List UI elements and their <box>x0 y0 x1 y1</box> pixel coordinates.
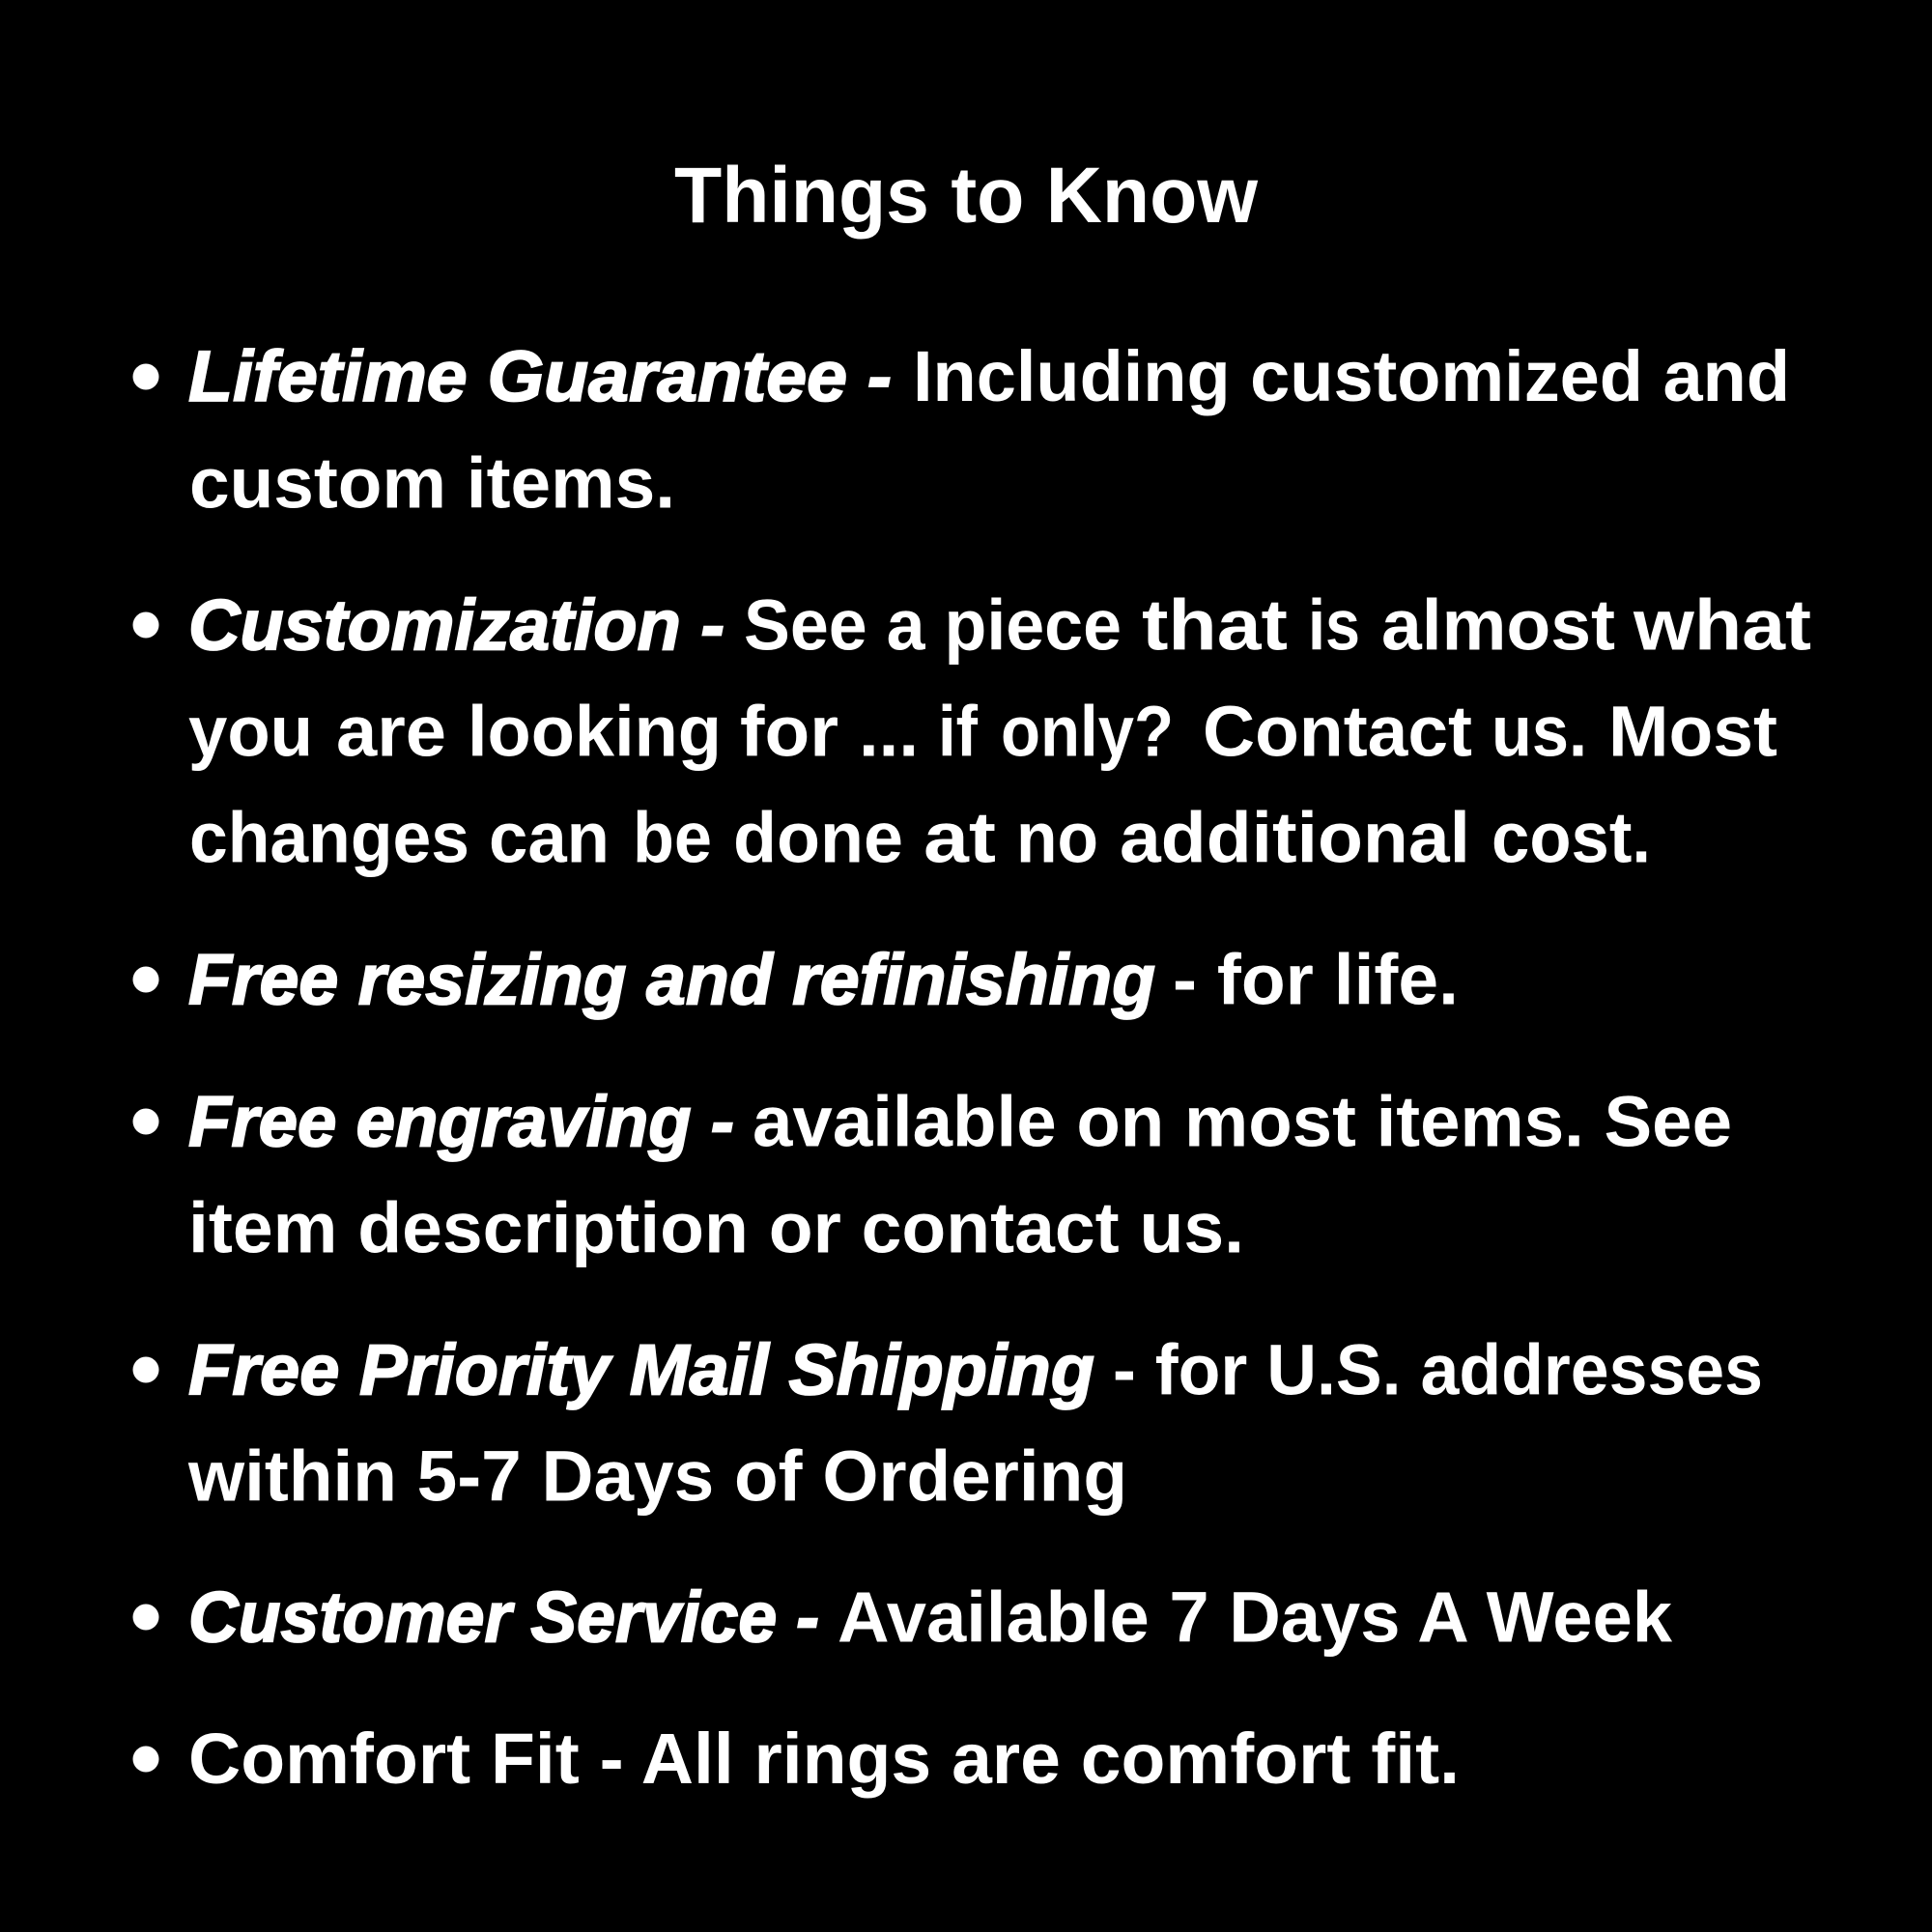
title: Things to Know <box>674 152 1258 240</box>
list item: Customization: you <box>188 692 313 771</box>
list item: Customization: is <box>1308 585 1360 665</box>
list item: Free Priority Mail Shipping: Free Priority Mail Shipping <box>188 1329 1094 1410</box>
list item: Free engraving: item description or contact us. <box>188 1188 1244 1267</box>
list item: Lifetime Guarantee: Lifetime Guarantee - <box>188 336 892 416</box>
list item: Free engraving: available on most items. See <box>753 1082 1732 1161</box>
list item: Customization: See a piece <box>744 585 1122 665</box>
list item: Customization: that <box>1142 585 1288 665</box>
list item: Customization <box>133 585 1811 877</box>
list item: Comfort Fit: Comfort Fit - All rings are comfort fit. <box>188 1719 1460 1799</box>
list item: Customization: at <box>923 798 996 877</box>
list item: Free Priority Mail Shipping: within 5-7 Days of Ordering <box>187 1435 1127 1517</box>
list item: Customization: almost <box>1381 585 1615 665</box>
list item: Customization: done <box>733 798 903 877</box>
list item: Customization: only? <box>1001 692 1174 771</box>
list item: Customization: additional <box>1120 798 1470 877</box>
list item: Free resizing and refinishing: - for life. <box>1173 939 1459 1020</box>
list item: Customization: if <box>938 692 978 771</box>
list item: Customization: be <box>633 798 712 877</box>
list item: Customization: changes <box>189 798 469 877</box>
list item: Free Priority Mail Shipping: - for U.S. addresses <box>1113 1329 1763 1410</box>
list item: Customization: for <box>740 692 838 771</box>
list item: Customization: Most <box>1608 692 1777 771</box>
list item: Free engraving <box>133 1082 1732 1267</box>
list item: Customization: cost. <box>1492 798 1651 877</box>
list item: Free resizing and refinishing: Free resizing and refinishing <box>188 939 1155 1020</box>
list item: Customer Service: Customer Service - <box>188 1577 819 1658</box>
list item: Customization: what <box>1633 585 1811 665</box>
list item: Customization: looking <box>468 692 722 771</box>
list item: Lifetime Guarantee <box>133 336 1790 524</box>
list item: Customization: can <box>489 798 610 877</box>
list item: Customer Service <box>133 1577 1673 1658</box>
list item: Customer Service: Available 7 Days A Week <box>838 1577 1673 1658</box>
list item: Customization: no <box>1016 798 1098 877</box>
list item: Lifetime Guarantee: custom items. <box>189 442 675 524</box>
list item: Free engraving: Free engraving - <box>188 1082 734 1161</box>
list item: Customization: Contact <box>1203 692 1472 771</box>
list item: Customization: are <box>336 692 446 771</box>
list item: Customization: Customization - <box>188 585 724 665</box>
list item: Free Priority Mail Shipping <box>133 1329 1763 1517</box>
list item: Customization: ... <box>859 692 919 771</box>
list item: Lifetime Guarantee: Including customized and <box>913 336 1790 416</box>
list item: Customization: us. <box>1492 692 1587 771</box>
